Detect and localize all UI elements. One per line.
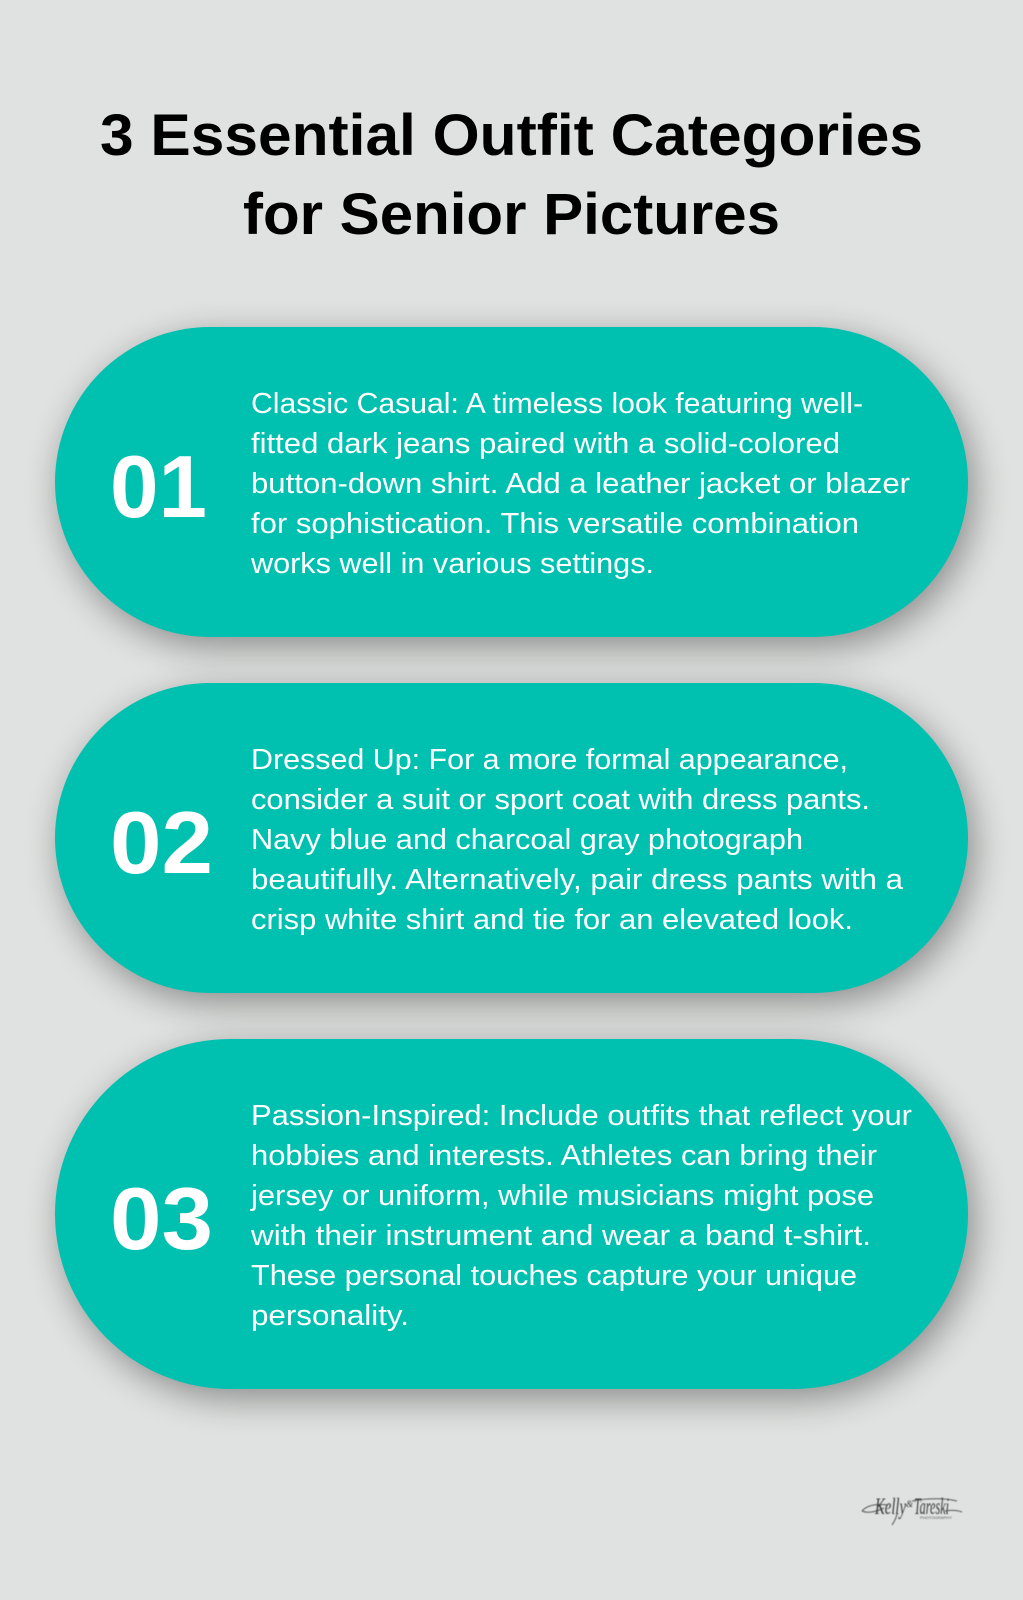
description: classic casual: works well in various settings. — [250, 548, 654, 580]
description: classic casual: Classic Casual: A timeless look featuring well- — [251, 388, 863, 420]
title: for Senior Pictures — [243, 182, 780, 247]
number 02: 02 — [110, 793, 213, 892]
description: dressed up: crisp white shirt and tie for an elevated look. — [251, 904, 853, 936]
description: classic casual: button-down shirt. Add a leather jacket or blazer — [251, 468, 911, 500]
description: passion-inspired: These personal touches capture your unique — [251, 1260, 857, 1292]
panel: dressed up — [55, 683, 974, 1003]
logo: signature: Kelly — [874, 1494, 906, 1519]
description: passion-inspired: hobbies and interests. Athletes can bring their — [251, 1140, 878, 1172]
title — [100, 103, 923, 247]
logo: signature: PHOTOGRAPHY — [920, 1516, 953, 1520]
description: dressed up: Navy blue and charcoal gray photograph — [251, 824, 803, 856]
description: classic casual: fitted dark jeans paired with a solid-colored — [251, 428, 840, 460]
panel: classic casual — [55, 327, 974, 647]
logo: signature — [862, 1494, 962, 1525]
logo: signature: & — [906, 1499, 913, 1509]
description: dressed up: Dressed Up: For a more formal appearance, — [251, 744, 848, 776]
number 01: 01 — [110, 437, 207, 536]
description: passion-inspired: Passion-Inspired: Include outfits that reflect your — [251, 1100, 913, 1132]
description: dressed up — [251, 744, 903, 936]
title: 3 Essential Outfit Categories — [100, 103, 923, 168]
description: classic casual — [250, 388, 911, 580]
logo: signature: Tareski — [914, 1494, 949, 1519]
description: passion-inspired: personality. — [251, 1300, 409, 1332]
description: classic casual: for sophistication. This versatile combination — [251, 508, 859, 540]
description: passion-inspired: jersey or uniform, while musicians might pose — [250, 1180, 874, 1212]
description: passion-inspired: with their instrument and wear a band t-shirt. — [250, 1220, 871, 1252]
description: dressed up: consider a suit or sport coat with dress pants. — [251, 784, 870, 816]
description: passion-inspired — [250, 1100, 913, 1332]
panel: passion-inspired — [55, 1039, 974, 1399]
number 03: 03 — [110, 1169, 213, 1268]
description: dressed up: beautifully. Alternatively, pair dress pants with a — [251, 864, 903, 896]
